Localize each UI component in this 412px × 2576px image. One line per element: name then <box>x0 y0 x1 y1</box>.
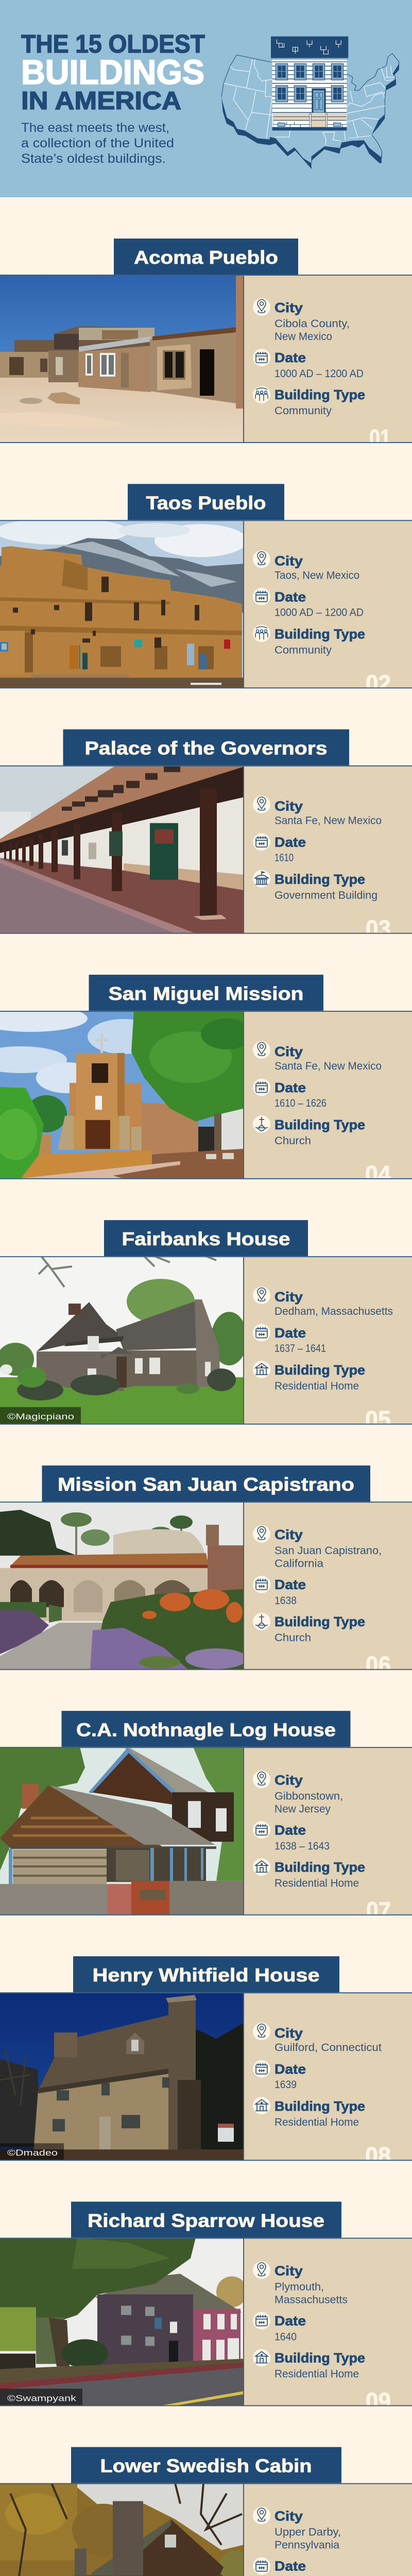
date row <box>253 1324 326 1354</box>
panel: Taos Pueblo <box>0 484 412 697</box>
rank number: 01 <box>369 425 391 451</box>
date row: 1610 – 1626 <box>274 1097 327 1109</box>
name bar <box>73 1956 339 1992</box>
rank number: 09 <box>366 2387 391 2414</box>
city row: Upper Darby, <box>274 2527 341 2538</box>
hero header <box>0 0 412 197</box>
building type row: Building Type <box>274 1859 365 1875</box>
building type row: Residential Home <box>274 1380 359 1392</box>
name bar <box>128 484 284 520</box>
date row: Date <box>274 1822 306 1838</box>
info panel <box>243 2238 412 2414</box>
photo credit <box>0 2143 64 2160</box>
city row: New Mexico <box>274 331 332 343</box>
date row: 1610 <box>274 852 294 864</box>
illustration: US map with building <box>221 37 399 169</box>
city row: Santa Fe, New Mexico <box>274 815 382 827</box>
city row <box>253 2507 341 2551</box>
date row: Date <box>274 2313 306 2328</box>
photo credit: ©Dmadeo <box>7 2148 58 2158</box>
panel: San Miguel Mission <box>0 975 412 1188</box>
building type row: Building Type <box>274 1362 365 1378</box>
city row: City <box>274 553 303 568</box>
info panel <box>243 1992 412 2169</box>
building type row <box>253 2349 365 2380</box>
building type row: Residential Home <box>274 2116 359 2128</box>
building type row <box>253 386 365 417</box>
name bar <box>42 1465 370 1501</box>
date row <box>253 1078 327 1109</box>
name bar <box>114 239 298 275</box>
city row: Cibola County, <box>274 318 350 330</box>
name bar <box>104 1220 308 1256</box>
date row: 1000 AD – 1200 AD <box>274 606 364 618</box>
name bar <box>71 2447 341 2483</box>
building type row: Church <box>274 1135 311 1147</box>
info panel <box>243 520 412 697</box>
subtitle <box>21 121 174 166</box>
date row <box>253 833 306 864</box>
city row: California <box>274 1558 323 1569</box>
photo: Henry Whitfield House <box>0 1992 243 2160</box>
subtitle: The east meets the west, <box>21 121 169 135</box>
info panel <box>243 275 412 451</box>
name bar <box>71 2201 341 2238</box>
date row: Date <box>274 350 306 365</box>
date row <box>253 588 364 618</box>
info panel <box>243 1747 412 1924</box>
city row <box>253 550 359 581</box>
photo: Acoma Pueblo <box>0 275 243 443</box>
city row: Pennsylvania <box>274 2539 339 2551</box>
date row <box>253 2060 306 2091</box>
date row <box>253 2312 306 2343</box>
panel: Palace of the Governors <box>0 730 412 942</box>
building type row: Building Type <box>274 1614 365 1629</box>
date row: Date <box>274 1080 306 1095</box>
date row: 1639 <box>274 2079 297 2091</box>
panel: Henry Whitfield House <box>0 1956 412 2169</box>
building type row: Building Type <box>274 387 365 402</box>
panel: Lower Swedish Cabin <box>0 2447 412 2576</box>
city row: Guilford, Connecticut <box>274 2042 382 2054</box>
city row: Massachusetts <box>274 2294 348 2306</box>
date row <box>253 349 364 380</box>
building type row: Building Type <box>274 2350 365 2365</box>
city row: City <box>274 2509 303 2524</box>
building type row <box>253 870 377 902</box>
name bar: Acoma Pueblo <box>134 247 278 268</box>
date row: Date <box>274 589 306 604</box>
name bar: Henry Whitfield House <box>93 1964 319 1986</box>
name bar <box>63 730 349 766</box>
city row <box>253 2023 382 2054</box>
date row: 1640 <box>274 2331 297 2343</box>
building type row <box>253 2097 365 2128</box>
date row: Date <box>274 2558 306 2574</box>
city row: City <box>274 2263 303 2278</box>
city row: City <box>274 1044 303 1059</box>
name bar: C.A. Nothnagle Log House <box>76 1719 336 1740</box>
city row <box>253 1771 343 1815</box>
panel: Richard Sparrow House <box>0 2201 412 2414</box>
subtitle: a collection of the United <box>21 136 174 150</box>
city row: City <box>274 2025 303 2041</box>
rank number: 05 <box>365 1406 391 1433</box>
city row: New Jersey <box>274 1803 331 1815</box>
city row <box>253 796 382 827</box>
name bar: Palace of the Governors <box>84 738 328 759</box>
name bar: Mission San Juan Capistrano <box>58 1473 354 1495</box>
photo: San Miguel Mission <box>0 1005 252 1179</box>
building type row <box>253 1858 365 1889</box>
info panel <box>243 1501 412 1679</box>
date row: 1638 <box>274 1595 297 1606</box>
info panel <box>243 1256 412 1433</box>
building type row: Building Type <box>274 1117 365 1132</box>
name bar: Richard Sparrow House <box>88 2210 324 2231</box>
photo credit <box>0 2388 82 2405</box>
rank number: 03 <box>366 916 391 942</box>
title: IN AMERICA <box>21 87 181 115</box>
building type row <box>253 1613 365 1643</box>
building type row: Community <box>274 644 332 656</box>
name bar: San Miguel Mission <box>108 983 304 1004</box>
date row <box>253 2557 331 2576</box>
city row: Plymouth, <box>274 2281 324 2293</box>
building type row <box>253 624 365 656</box>
date row: 1638 – 1643 <box>274 1840 330 1852</box>
photo: Palace of the Governors <box>0 766 243 934</box>
name bar: Lower Swedish Cabin <box>100 2455 312 2477</box>
rank number: 04 <box>365 1161 391 1188</box>
date row: Date <box>274 1577 306 1592</box>
panel: Fairbanks House <box>0 1220 412 1433</box>
subtitle: State’s oldest buildings. <box>21 151 166 166</box>
title: BUILDINGS <box>21 53 204 92</box>
date row: 1637 – 1641 <box>274 1343 326 1354</box>
building type row: Government Building <box>274 890 377 902</box>
date row: Date <box>274 2061 306 2077</box>
photo: Taos Pueblo <box>0 518 247 688</box>
city row: City <box>274 1772 303 1788</box>
panel: C.A. Nothnagle Log House <box>0 1711 412 1924</box>
photo: Fairbanks House <box>0 1256 247 1424</box>
photo: Richard Sparrow House <box>0 2238 247 2405</box>
photo: Mission San Juan Capistrano <box>0 1501 247 1669</box>
city row: San Juan Capistrano, <box>274 1545 382 1557</box>
title <box>21 30 205 115</box>
rank number: 02 <box>366 670 391 697</box>
city row: City <box>274 799 303 814</box>
info panel <box>243 1011 412 1188</box>
photo: C.A. Nothnagle Log House <box>0 1747 243 1915</box>
title: THE 15 OLDEST <box>21 30 205 58</box>
panel: Acoma Pueblo <box>0 239 412 451</box>
city row <box>253 2261 348 2306</box>
building type row: Building Type <box>274 872 365 887</box>
building type row <box>253 1115 365 1147</box>
building type row: Residential Home <box>274 2368 359 2380</box>
building type row: Residential Home <box>274 1877 359 1889</box>
building type row <box>253 1361 365 1392</box>
building type row: Building Type <box>274 626 365 641</box>
panel: Mission San Juan Capistrano <box>0 1465 412 1679</box>
building type row: Community <box>274 405 332 417</box>
city row: Taos, New Mexico <box>274 569 359 581</box>
date row <box>253 1821 330 1852</box>
info panel <box>243 2483 412 2576</box>
date row: Date <box>274 1325 306 1341</box>
rank number: 06 <box>366 1652 391 1679</box>
city row <box>253 1286 393 1317</box>
photo credit: ©Magicpiano <box>7 1412 74 1421</box>
city row: City <box>274 1527 303 1543</box>
rank number: 08 <box>365 2142 391 2169</box>
building type row: Building Type <box>274 2098 365 2114</box>
city row <box>253 1041 382 1072</box>
city row: City <box>274 1289 303 1304</box>
city row <box>253 1525 382 1569</box>
city row: City <box>274 300 303 315</box>
name bar: Taos Pueblo <box>146 492 266 513</box>
photo credit <box>0 1407 81 1424</box>
city row: Dedham, Massachusetts <box>274 1306 393 1317</box>
date row: 1000 AD – 1200 AD <box>274 368 364 380</box>
building type row: Church <box>274 1632 311 1643</box>
rank number: 07 <box>366 1897 391 1924</box>
name bar: Fairbanks House <box>122 1228 290 1249</box>
name bar <box>89 975 323 1011</box>
photo: Lower Swedish Cabin <box>0 2483 258 2576</box>
name bar <box>62 1711 350 1747</box>
city row: Santa Fe, New Mexico <box>274 1060 382 1072</box>
date row <box>253 1575 306 1606</box>
city row: Gibbonstown, <box>274 1790 343 1802</box>
info panel <box>243 766 412 942</box>
city row <box>253 298 350 343</box>
date row: Date <box>274 835 306 850</box>
photo credit: ©Swampyank <box>7 2393 77 2403</box>
